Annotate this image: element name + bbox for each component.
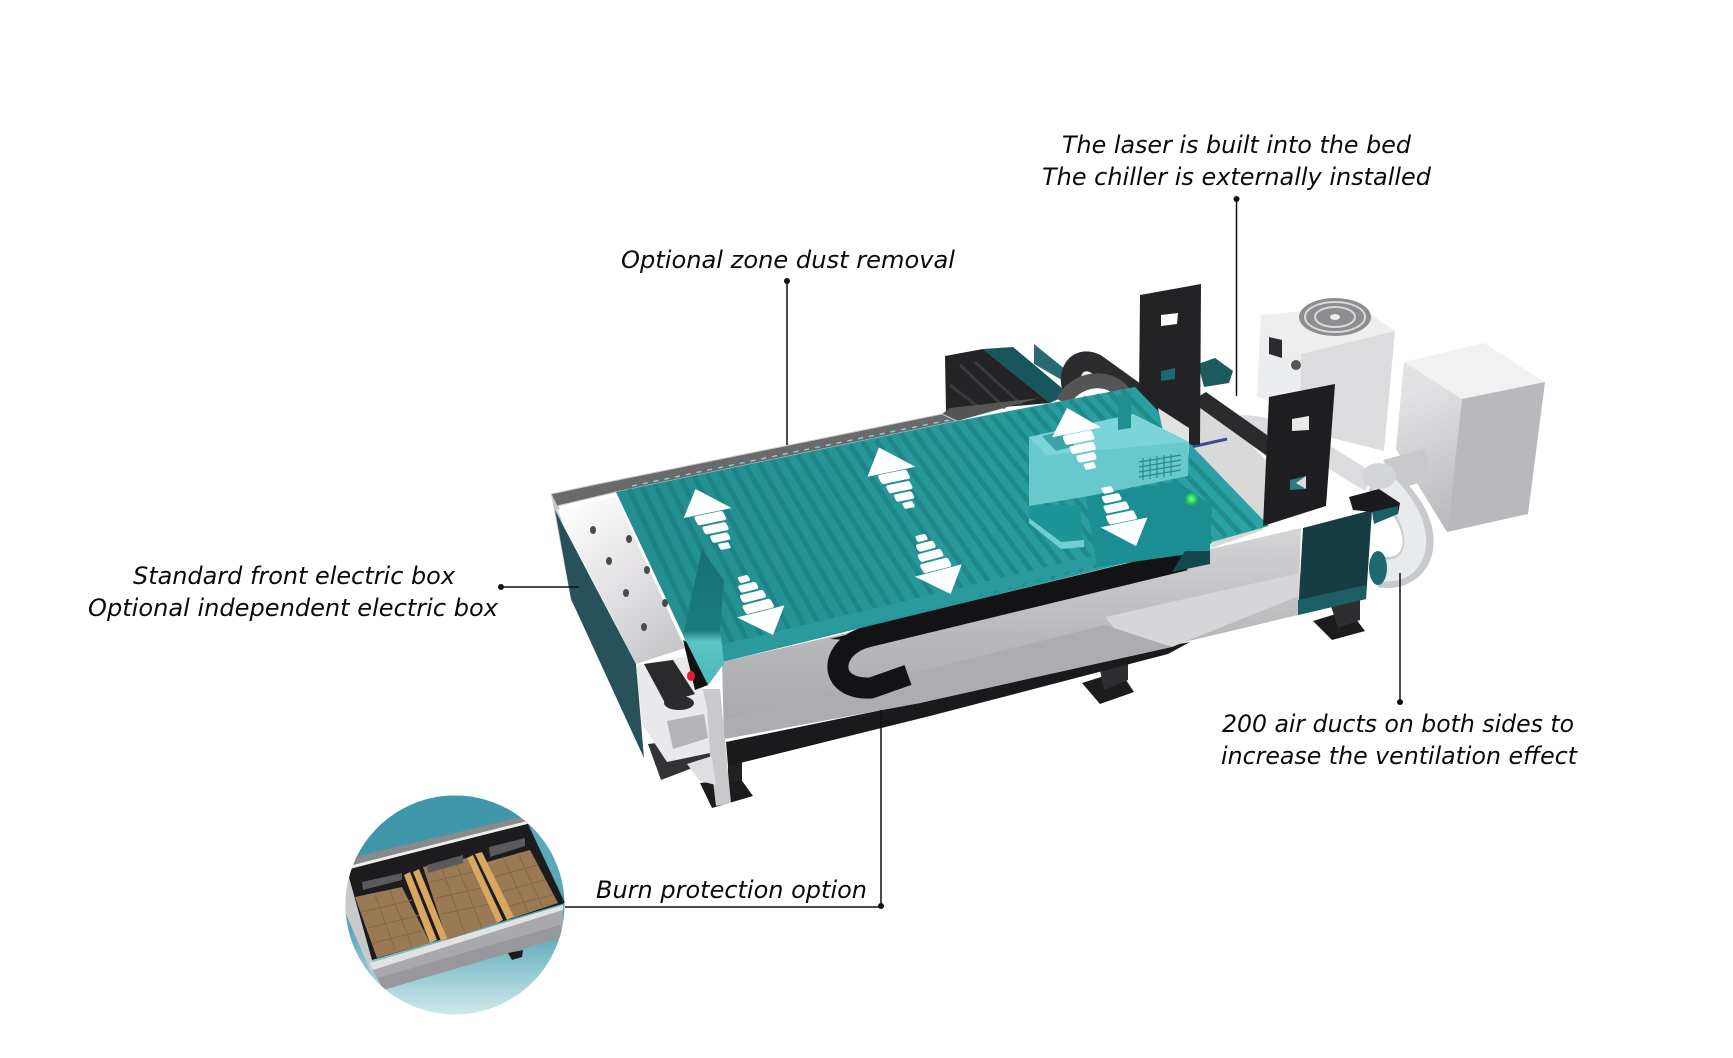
support legs — [700, 595, 1365, 808]
callout line: burn protection — [565, 710, 884, 909]
rear upright plate — [1139, 284, 1201, 445]
console post — [687, 689, 731, 806]
callout line: chiller and laser — [1234, 196, 1240, 396]
airflow arrow up 1 — [672, 484, 750, 554]
callout line: dust removal — [784, 278, 790, 470]
rear rail — [551, 414, 957, 506]
text: burn protection: Burn protection option — [596, 876, 867, 904]
mouse — [664, 696, 694, 710]
text: electric box: Standard front electric box — [133, 562, 456, 590]
right teal side cover — [1298, 489, 1400, 615]
front cable chain — [838, 560, 1185, 688]
text: air ducts: increase the ventilation effect — [1221, 742, 1579, 770]
front upright plate — [1263, 384, 1335, 526]
laser head carriage — [1029, 392, 1212, 572]
air ducts — [1240, 425, 1433, 585]
gantry beam — [1185, 358, 1275, 548]
text: electric box: Optional independent electric box — [88, 594, 499, 622]
text: air ducts — [1221, 710, 1579, 770]
callout line: electric box — [498, 584, 579, 590]
laser cutting machine — [551, 284, 1545, 808]
icon: green status light — [1184, 492, 1198, 506]
dust collector box — [1396, 343, 1545, 532]
keyboard — [644, 660, 695, 703]
text: zone dust removal: Optional zone dust removal — [621, 246, 955, 274]
burn protection detail circle — [340, 790, 570, 1020]
infographic canvas — [88, 134, 1578, 1014]
text: laser and chiller: The chiller is externally installed — [1042, 163, 1432, 191]
text: laser and chiller: The laser is built into the bed — [1062, 131, 1412, 159]
console tray — [636, 655, 710, 762]
airflow arrow down 2 — [896, 529, 974, 600]
rear dust zone stack — [942, 344, 1071, 421]
chiller unit — [1257, 298, 1395, 451]
text: electric box — [88, 562, 499, 622]
airflow arrow up 3 — [1042, 403, 1116, 474]
text: laser and chiller — [1042, 131, 1432, 191]
left end panel — [551, 494, 724, 780]
rear cable chain — [1063, 361, 1160, 428]
long side frame — [722, 528, 1309, 766]
callout line: air ducts — [1397, 573, 1403, 705]
airflow arrow down 3 — [1082, 482, 1160, 551]
text: air ducts: 200 air ducts on both sides to — [1222, 710, 1574, 738]
control monitor — [683, 549, 724, 690]
white electric box plate — [557, 497, 685, 664]
teal dust zone plane over cutting bed — [616, 387, 1269, 664]
airflow arrow up 2 — [855, 442, 934, 513]
airflow arrow down 1 — [719, 570, 797, 641]
